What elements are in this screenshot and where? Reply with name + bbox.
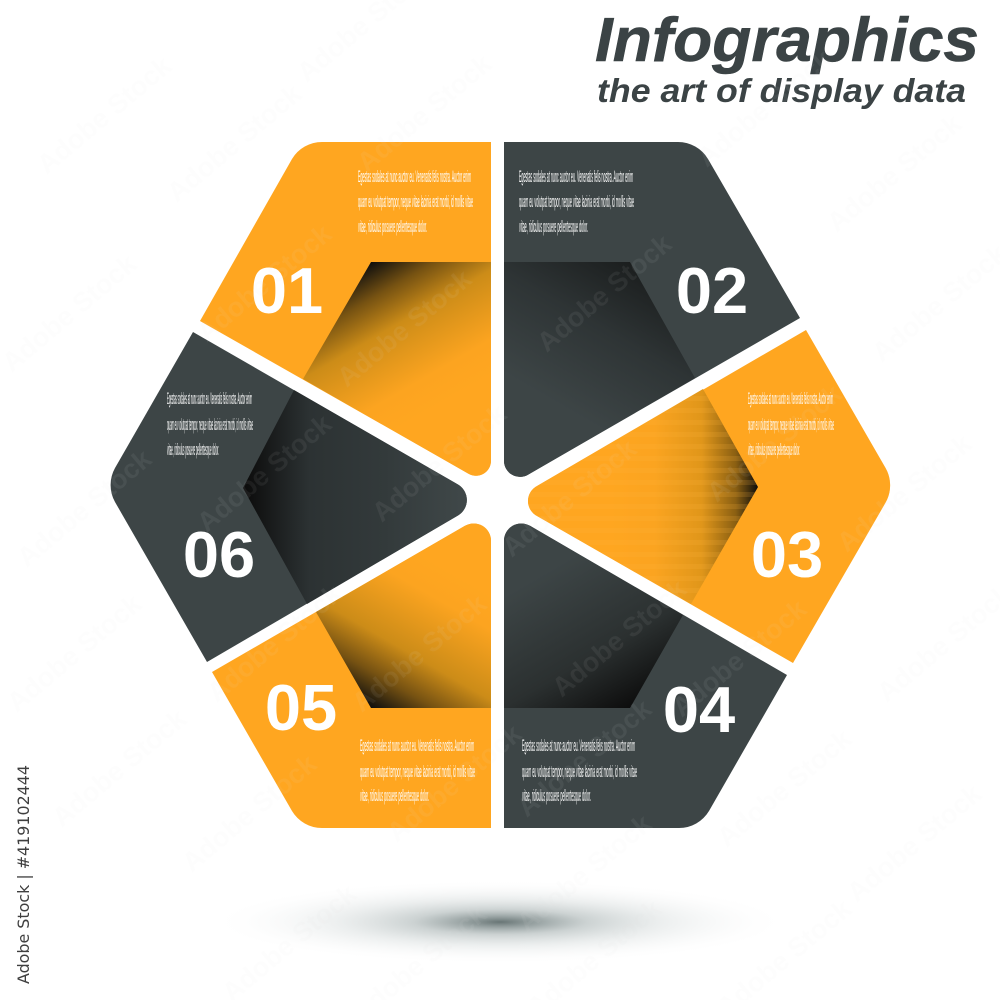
stock watermark pattern: Adobe Stock [1, 588, 148, 718]
panel 04 inner fold [504, 523, 683, 708]
infographic canvas: quam eu volutpat tempor, neque vitae lacinia erat morbi, id mollis vitae [358, 192, 473, 211]
stock watermark pattern: Adobe Stock [201, 578, 348, 708]
stock watermark pattern: Adobe Stock [381, 718, 528, 848]
stock watermark pattern: Adobe Stock [841, 778, 988, 908]
stock watermark pattern: Adobe Stock [531, 228, 678, 358]
stock watermark pattern: Adobe Stock [666, 593, 813, 723]
stock watermark pattern: Adobe Stock [31, 50, 178, 180]
panel 02 text [519, 167, 634, 236]
stock watermark pattern: Adobe Stock [821, 108, 968, 238]
panel 01 text [358, 167, 473, 236]
panel 03 number: 03 [751, 518, 823, 591]
panel 06: Egestas sodales at nunc auctor eu. Venenatis felis nostra. Auctor enim [167, 389, 252, 408]
panel 06: vitae, ridiculus posuere pellentesque dolor. [167, 440, 219, 459]
stock watermark pattern: Adobe Stock [831, 428, 978, 558]
panel 02 number: 02 [676, 254, 748, 327]
stock watermark pattern: Adobe Stock [701, 378, 848, 508]
panel 05 inner fold [316, 523, 491, 708]
infographic canvas: quam eu volutpat tempor, neque vitae lacinia erat morbi, id mollis vitae [360, 762, 475, 781]
infographic canvas: Egestas sodales at nunc auctor eu. Venenatis felis nostra. Auctor enim [358, 167, 471, 186]
panel 06 shape [111, 332, 467, 662]
panel 06 number: 06 [183, 518, 255, 591]
stock watermark pattern: Adobe Stock [161, 78, 308, 208]
stock watermark pattern: Adobe Stock [11, 443, 158, 573]
panel 03 [528, 330, 890, 663]
panel 01 shape [200, 142, 491, 476]
panel 05 shape [212, 523, 491, 828]
stock watermark pattern: Adobe Stock [691, 43, 838, 173]
infographic canvas: Egestas sodales at nunc auctor eu. Venenatis felis nostra. Auctor enim [360, 736, 474, 755]
panel 01 number: 01 [251, 254, 323, 327]
panel 03 stripes [528, 389, 758, 604]
stock watermark pattern: Adobe Stock [191, 218, 338, 348]
panel 04 text [522, 736, 637, 805]
stock watermark pattern: Adobe Stock [346, 588, 493, 718]
stock watermark pattern: Adobe Stock [711, 723, 858, 853]
stock watermark pattern: Adobe Stock [0, 248, 143, 378]
panel 03 inner fold [528, 389, 758, 604]
panel 03 text [748, 389, 834, 459]
panel 03 shape [528, 330, 890, 663]
panel 06 [111, 332, 467, 662]
panel 05 number: 05 [265, 671, 337, 744]
infographic canvas: vitae, ridiculus posuere pellentesque dolor. [360, 786, 429, 805]
panel 01 [200, 142, 491, 476]
stock watermark pattern: Adobe Stock [546, 573, 693, 703]
stock watermark pattern: Adobe Stock [176, 748, 323, 878]
floor shadow [210, 880, 790, 964]
stock watermark pattern: Adobe Stock [351, 48, 498, 178]
panel 02: vitae, ridiculus posuere pellentesque dolor. [519, 217, 588, 236]
title block [595, 6, 979, 109]
stock watermark pattern: Adobe Stock [496, 433, 643, 563]
stock watermark pattern: Adobe Stock [366, 398, 513, 528]
stock watermark pattern: Adobe Stock [191, 408, 338, 538]
panel 04 shape [504, 523, 787, 828]
title: Infographics [595, 6, 979, 75]
panel 05 [212, 523, 491, 828]
stock id vertical label: Adobe Stock | #419102444 [14, 765, 33, 984]
stock watermark pattern: Adobe Stock [331, 263, 478, 393]
panel 06: quam eu volutpat tempor, neque vitae lacinia erat morbi, id mollis vitae [167, 415, 253, 434]
stock watermark pattern: Adobe Stock [511, 808, 658, 938]
panel 04 [504, 523, 787, 828]
panel 02 inner fold [504, 262, 695, 477]
panel 06 inner fold [243, 390, 467, 604]
panel 05 text [360, 736, 475, 805]
panel 06 text [167, 389, 253, 459]
stock watermark pattern: Adobe Stock [511, 693, 658, 823]
panel 04: vitae, ridiculus posuere pellentesque dolor. [522, 786, 591, 805]
panel 04 number: 04 [663, 673, 735, 746]
panel 01 inner fold [303, 262, 491, 476]
panel 02 [504, 142, 800, 477]
panel 02 shape [504, 142, 800, 477]
infographic canvas: vitae, ridiculus posuere pellentesque dolor. [358, 217, 427, 236]
subtitle: the art of display data [597, 72, 966, 109]
stock watermark pattern: Adobe Stock [46, 703, 193, 833]
